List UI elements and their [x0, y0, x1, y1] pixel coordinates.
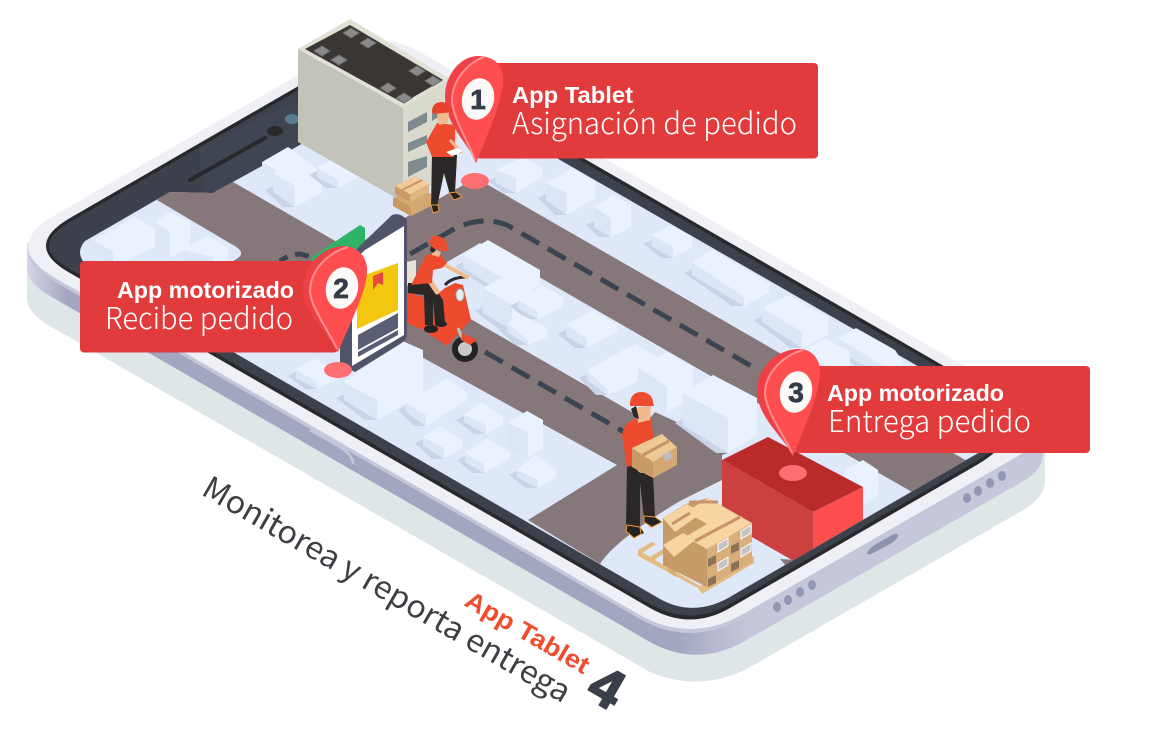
phone screen frame	[46, 51, 1010, 619]
rider shoes	[424, 321, 447, 333]
handlebar	[445, 277, 467, 285]
pin 3	[757, 349, 820, 456]
step 4 heading: App Tablet	[460, 586, 595, 680]
phone bezel	[28, 40, 1043, 633]
legs	[626, 465, 662, 538]
pin 1	[445, 56, 503, 163]
phone case	[340, 214, 407, 372]
speaker holes right	[963, 471, 1006, 503]
front camera and speaker	[190, 114, 299, 180]
roof	[298, 19, 450, 108]
callout 1 heading: App Tablet	[512, 82, 633, 108]
callout 3 heading: App motorizado	[827, 380, 1004, 406]
callout 1	[476, 63, 818, 158]
stacked parcels	[393, 176, 431, 216]
callout 3	[795, 366, 1090, 453]
phone body side	[27, 100, 1043, 655]
rider legs	[408, 283, 445, 325]
barcodes	[708, 542, 739, 587]
scooter wheel	[452, 328, 478, 362]
delivery crate	[406, 260, 416, 286]
shoes	[431, 192, 462, 213]
bookmark	[373, 272, 383, 290]
scooter fender	[461, 333, 477, 345]
rider head	[430, 236, 449, 257]
headlight	[456, 289, 464, 301]
scooter body	[407, 283, 471, 346]
green card behind phone	[312, 225, 365, 290]
windows	[408, 104, 440, 177]
step 4 number: 4	[578, 653, 636, 722]
pin 2: 2	[333, 273, 349, 304]
phone drop shadow	[27, 100, 1045, 682]
callout 2 heading: App motorizado	[117, 277, 294, 303]
tape	[672, 502, 740, 541]
labels	[718, 525, 751, 571]
rider arms	[424, 265, 467, 292]
app phone illustration	[340, 214, 407, 372]
person on scooter	[406, 236, 478, 362]
carton side faces	[663, 498, 752, 587]
roof vents	[314, 28, 441, 103]
head and cap	[432, 102, 453, 125]
clipboard	[446, 148, 463, 156]
map marker dot 3	[779, 465, 807, 481]
rider shirt	[411, 253, 447, 285]
callout 1 subtitle: Asignación de pedido	[512, 99, 797, 143]
pin 3: 3	[788, 377, 804, 408]
carton tops	[663, 498, 752, 557]
left wall	[298, 49, 403, 202]
map marker dot 2	[324, 362, 352, 378]
side button	[310, 430, 353, 464]
shoes	[626, 516, 662, 538]
speaker holes bottom	[773, 580, 816, 612]
pallet with boxes	[638, 498, 754, 594]
carried parcel	[632, 434, 677, 478]
city blocks	[85, 147, 905, 505]
pallet	[638, 542, 754, 594]
delivery person with clipboard	[426, 102, 463, 213]
road dashes	[280, 221, 758, 444]
callout 2	[80, 261, 338, 352]
warehouse building	[298, 19, 457, 202]
phone display	[352, 226, 404, 366]
shirt	[426, 123, 455, 157]
roads	[157, 178, 967, 567]
callout 2 subtitle: Recibe pedido	[105, 294, 293, 338]
right wall	[403, 80, 457, 202]
shirt	[622, 413, 654, 467]
pin 1: 1	[470, 84, 486, 115]
arm	[450, 140, 462, 153]
delivery person with box	[622, 392, 677, 538]
legs	[431, 155, 457, 207]
charging port	[867, 534, 898, 554]
callout 3 subtitle: Entrega pedido	[828, 397, 1031, 441]
screen map base	[80, 77, 1002, 608]
step 4 description: Monitorea y reporta entrega	[196, 463, 581, 711]
product card	[357, 263, 398, 329]
red delivery destination block	[722, 437, 863, 572]
hand	[637, 463, 647, 473]
pin 2	[303, 246, 367, 352]
head and cap	[630, 392, 654, 423]
map marker dot 1	[461, 173, 489, 189]
text bars	[358, 313, 398, 357]
